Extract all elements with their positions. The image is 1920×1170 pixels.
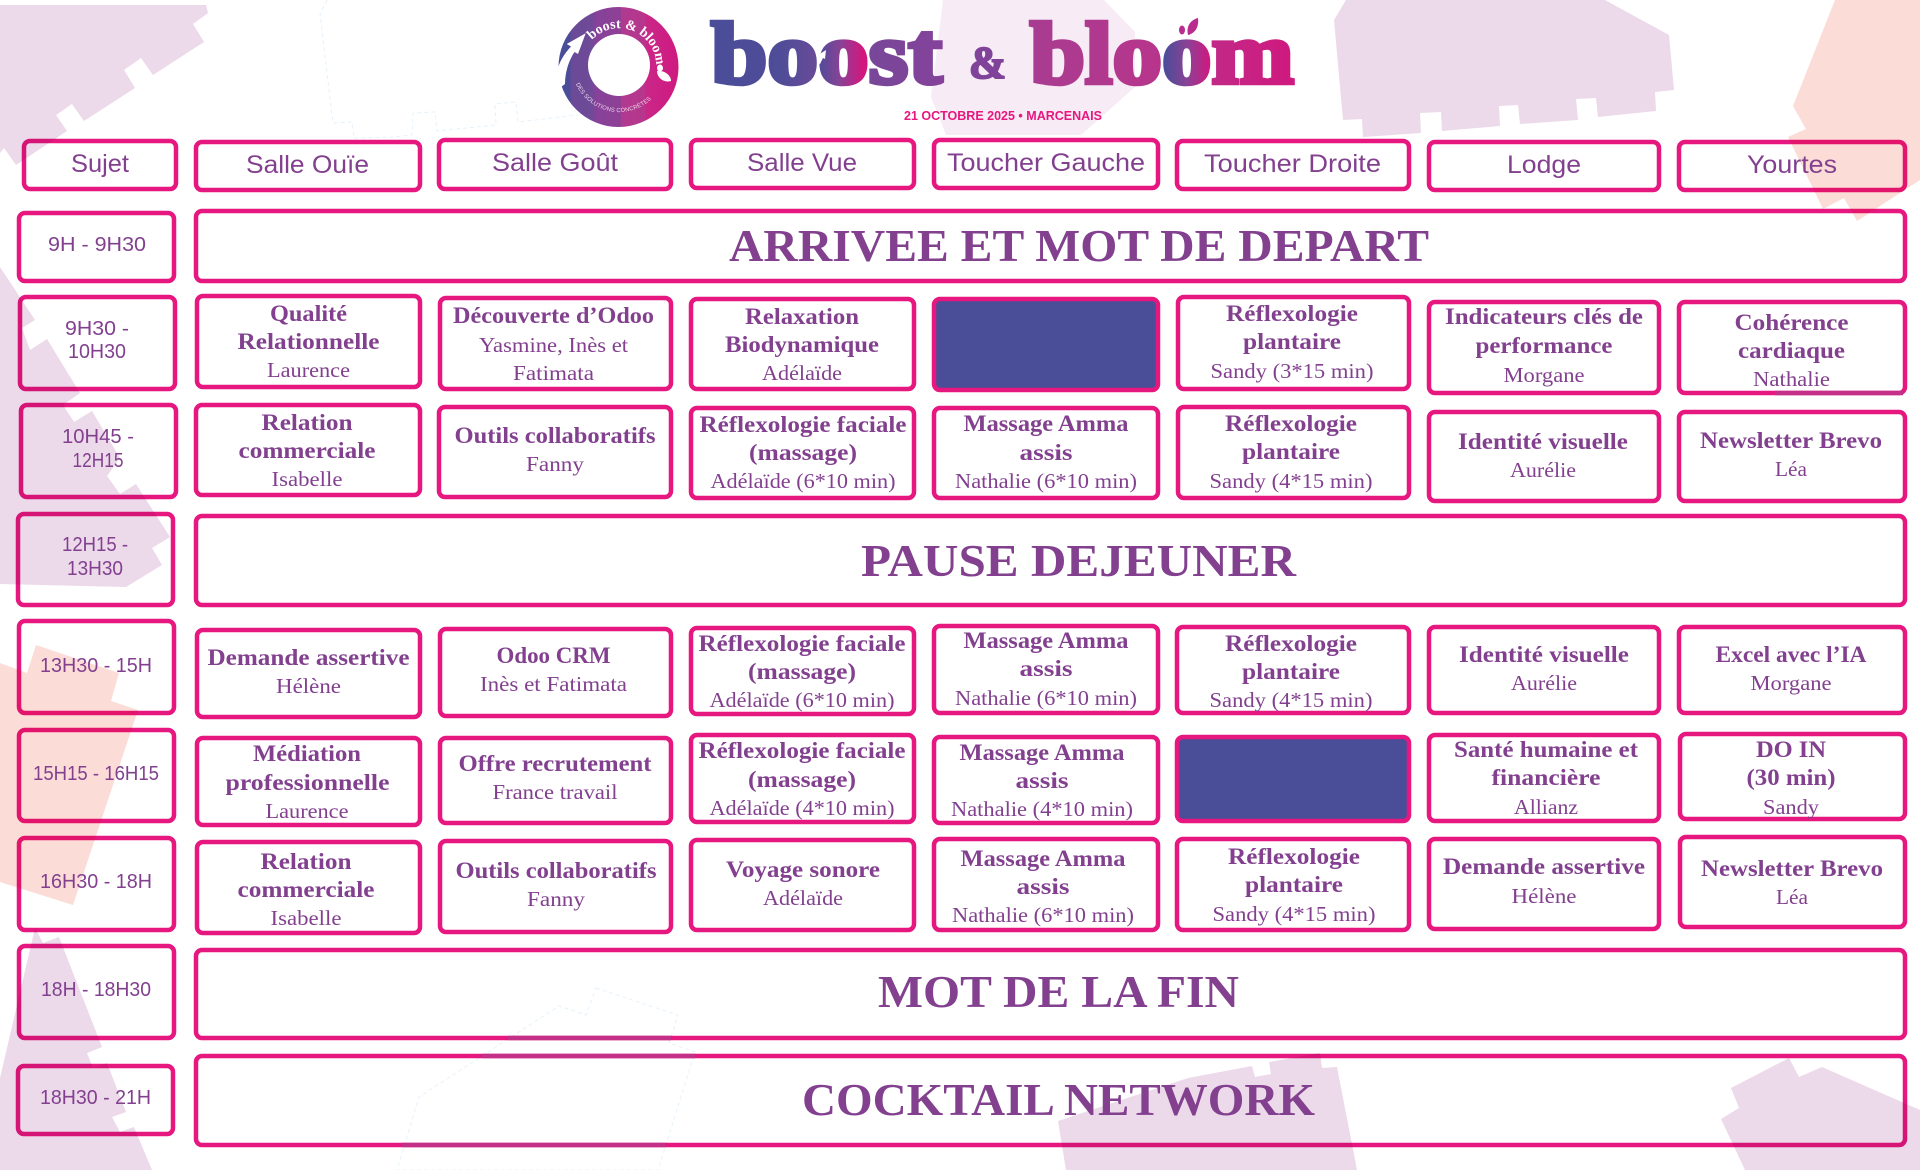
session: DO IN: DO IN [1756,737,1826,762]
session: Excel avec l'IA [1679,627,1905,713]
header: Salle Gout [439,140,671,189]
wordmark: ampersand: & [969,37,1006,88]
session: Decouverte d'Odoo: Découverte d’Odoo [453,303,654,328]
time: 9H30 - 10H30: 10H30 [68,341,126,363]
session: Mediation professionnelle: professionnelle [226,770,390,795]
header: Lodge: Lodge [1507,151,1581,179]
session: Qualite Relationnelle: Laurence [267,358,350,382]
row: 13H30 - 15H [19,621,1905,717]
session: Relation commerciale: Relation [260,849,352,874]
session: Reflexologie faciale 6x10: (massage) [748,659,856,684]
time: 10H45 - 12H15: 10H45 - [62,426,134,448]
session: Newsletter Brevo: Newsletter Brevo [1701,856,1883,881]
session: Reflexologie plantaire 4x15: Sandy (4*15 min) [1210,469,1372,493]
session: Decouverte d'Odoo: Fatimata [513,361,594,385]
session: Reflexologie faciale 6x10: Adélaïde (6*10 min) [710,688,894,712]
session: Reflexologie plantaire 3x15: plantaire [1243,329,1341,354]
session: Massage Amma assis 6x10: assis [1020,656,1073,681]
session: Newsletter Brevo: Léa [1775,457,1807,481]
session: Identite visuelle: Aurélie [1511,671,1577,695]
session: Massage Amma assis 6x10: assis [1016,874,1070,899]
session: Odoo CRM: Inès et Fatimata [480,672,627,696]
row: 16H30 - 18H [19,837,1905,933]
background shape: top left [0,5,208,165]
time: 18H30 - 21H: 18H30 - 21H [40,1087,151,1109]
session: Relaxation Biodynamique [691,299,914,389]
logo ring text bottom: DES SOLUTIONS CONCRÈTES [576,82,651,112]
blocked slot: Toucher Droite [1177,737,1409,821]
session: Outils collaboratifs [439,407,671,497]
session: Newsletter Brevo: Léa [1776,885,1808,909]
session: Massage Amma assis 6x10: Massage Amma [964,628,1129,653]
session: Excel avec l'IA: Excel avec l’IA [1716,642,1867,667]
blocked slot: Toucher Gauche [934,299,1158,390]
time: 12H15 - 13H30 [18,514,173,605]
header: Salle Vue [691,140,914,188]
logo arrow [557,33,586,90]
session: Massage Amma assis 6x10 [934,408,1158,498]
session: Reflexologie faciale 6x10: Adélaïde (6*10 min) [710,469,896,493]
header: Salle Vue: Salle Vue [747,149,857,177]
header: Toucher Gauche: Toucher Gauche [947,149,1145,177]
session: Demande assertive [1429,839,1659,929]
session: Relation commerciale [196,405,420,495]
session: Relation commerciale: commerciale [238,438,376,463]
session: Identite visuelle: Identité visuelle [1458,429,1628,454]
wordmark: small arrow [817,50,826,64]
session: Relaxation Biodynamique: Adélaïde [762,361,842,385]
time: 9H - 9H30: 9H - 9H30 [48,234,146,256]
session: Sante humaine et financiere [1429,735,1659,821]
banner: pause dejeuner: PAUSE DEJEUNER [861,535,1297,586]
background shape: left peach [0,645,138,905]
session: Reflexologie plantaire 4x15: Réflexologie [1225,631,1357,656]
background shape: bottom left purple [0,928,152,1170]
time: 10H45 - 12H15 [21,405,176,497]
session: Coherence cardiaque [1679,302,1905,393]
session: Sante humaine et financiere: Allianz [1514,795,1578,819]
session: Coherence cardiaque: Nathalie [1753,367,1830,391]
banner: mot de la fin: MOT DE LA FIN [878,966,1239,1017]
time: 13H30 - 15H: 13H30 - 15H [40,655,152,677]
header row [24,140,1905,190]
session: Identite visuelle [1429,627,1659,713]
header: Toucher Gauche [934,140,1158,188]
header: Toucher Droite [1177,141,1409,189]
session: Newsletter Brevo [1679,412,1905,501]
session: Relation commerciale: Isabelle [270,906,342,930]
time: 9H - 9H30 [19,213,174,281]
session: Massage Amma assis 6x10 [934,626,1158,713]
header: Yourtes: Yourtes [1747,151,1837,179]
wordmark: bloom: bloom [1030,6,1294,103]
header: Sujet: Sujet [71,150,129,178]
session: Reflexologie plantaire 4x15: plantaire [1242,439,1340,464]
session: Voyage sonore [691,840,914,930]
session: Massage Amma assis 6x10: Massage Amma [960,846,1126,871]
session: Offre recrutement: France travail [492,780,618,804]
row: 9H30 - 10H30 [20,296,1905,393]
session: Relaxation Biodynamique: Biodynamique [725,332,879,357]
session: Massage Amma assis 4x10: assis [1016,768,1069,793]
time: 18H30 - 21H [18,1066,173,1134]
session: Relaxation Biodynamique: Relaxation [745,304,859,329]
session: Reflexologie plantaire 4x15 [1178,407,1409,498]
banner: mot de la fin [196,950,1905,1038]
session: Identite visuelle: Aurélie [1510,458,1576,482]
row: 12H15 - 13H30 [18,514,1905,605]
session: Reflexologie plantaire 4x15 [1177,839,1409,930]
background shape: bottom right purple [1721,1058,1920,1170]
time: 12H15 - 13H30: 12H15 - [62,534,128,556]
session: Reflexologie plantaire 4x15: plantaire [1242,659,1340,684]
time: 9H30 - 10H30 [20,297,175,389]
row: 10H45 - 12H15 [21,405,1905,501]
time: 15H15 - 16H15 [19,730,174,821]
logo: circular badge [558,7,678,127]
header: Salle Ouie [196,142,420,190]
row: 18H - 18H30 [19,946,1905,1038]
session: DO IN: Sandy [1763,795,1819,819]
row: 18H30 - 21H [18,1056,1905,1145]
session: Demande assertive [197,630,420,717]
session: Excel avec l'IA: Morgane [1750,671,1832,695]
session: Massage Amma assis 6x10 [934,839,1158,930]
session: DO IN [1680,734,1905,819]
session: Offre recrutement [440,738,671,823]
session: Massage Amma assis 4x10: Nathalie (4*10 min) [951,797,1133,821]
header: Salle Gout: Salle Goût [492,149,618,177]
session: Qualite Relationnelle: Qualité [270,301,347,326]
session: Relation commerciale: Isabelle [272,467,342,491]
session: Mediation professionnelle [197,738,420,825]
header: Yourtes [1679,142,1905,190]
session: Demande assertive: Demande assertive [1443,854,1645,879]
session: Odoo CRM: Odoo CRM [496,643,611,668]
session: Identite visuelle [1429,412,1659,501]
session: Massage Amma assis 4x10 [934,737,1158,823]
session: Sante humaine et financiere: financière [1492,765,1600,790]
session: Offre recrutement: Offre recrutement [458,751,652,776]
session: Reflexologie plantaire 4x15: Réflexologie [1225,411,1357,436]
session: Massage Amma assis 6x10: Nathalie (6*10 min) [955,686,1137,710]
session: Identite visuelle: Identité visuelle [1459,642,1629,667]
session: Reflexologie faciale 4x10 [691,735,914,822]
session: Indicateurs cles de performance: Indicateurs clés de [1445,304,1643,329]
time: 16H30 - 18H: 16H30 - 18H [40,871,152,893]
session: Indicateurs cles de performance: Morgane [1504,363,1584,387]
background outline: top center dashed [320,0,578,138]
row: 15H15 - 16H15 [19,730,1905,825]
session: Massage Amma assis 6x10: Nathalie (6*10 min) [952,903,1134,927]
logo ring [558,7,678,127]
session: Qualite Relationnelle [197,296,420,387]
header: Lodge [1429,142,1659,190]
session: Reflexologie faciale 6x10: (massage) [749,440,857,465]
session: Reflexologie plantaire 3x15 [1178,297,1409,389]
session: Demande assertive: Hélène [1512,884,1576,908]
session: Reflexologie plantaire 3x15: Sandy (3*15 min) [1210,359,1374,383]
session: Reflexologie plantaire 3x15: Réflexologie [1226,301,1358,326]
session: Reflexologie plantaire 4x15: Sandy (4*15 min) [1212,902,1376,926]
session: Indicateurs cles de performance: performance [1476,333,1612,358]
time: 18H - 18H30: 18H - 18H30 [41,979,151,1001]
session: Outils collaboratifs: Outils collaboratifs [454,423,656,448]
session: Voyage sonore: Adélaïde [763,886,843,910]
session: Voyage sonore: Voyage sonore [726,857,880,882]
time: 15H15 - 16H15: 15H15 - 16H15 [33,763,159,785]
logo ring text top: boost & bloom [586,20,663,65]
header: Toucher Droite: Toucher Droite [1204,150,1381,178]
session: Outils collaboratifs: Fanny [527,887,585,911]
session: Outils collaboratifs: Outils collaboratifs [456,858,657,883]
date line: 21 OCTOBRE 2025 • MARCENAIS [904,108,1102,123]
wordmark: leaf [1179,18,1198,35]
session: DO IN: (30 min) [1746,765,1836,790]
row: 9H - 9H30 [19,211,1905,281]
session: Relation commerciale: commerciale [238,877,374,902]
session: Relation commerciale: Relation [262,410,353,435]
time: 12H15 - 13H30: 13H30 [67,558,123,580]
session: Reflexologie faciale 6x10: Réflexologie faciale [700,412,906,437]
session: Decouverte d'Odoo: Yasmine, Inès et [479,333,628,357]
session: Coherence cardiaque: cardiaque [1738,338,1845,363]
time: 10H45 - 12H15: 12H15 [72,450,124,472]
banner: cocktail network [196,1056,1905,1145]
background shape: bottom center purple [1058,1053,1357,1170]
session: Newsletter Brevo: Newsletter Brevo [1700,428,1882,453]
background shape: left purple [0,267,170,587]
banner: cocktail network: COCKTAIL NETWORK [802,1074,1315,1125]
background shape: faint behind title [931,0,1135,135]
session: Massage Amma assis 6x10: assis [1020,440,1073,465]
session: Reflexologie plantaire 4x15 [1177,627,1409,713]
session: Massage Amma assis 4x10: Massage Amma [960,740,1125,765]
session: Demande assertive: Demande assertive [208,645,410,670]
session: Reflexologie faciale 4x10: Adélaïde (4*10 min) [710,796,894,820]
session: Reflexologie faciale 4x10: Réflexologie faciale [698,738,906,763]
session: Newsletter Brevo [1680,837,1905,927]
time: 13H30 - 15H [19,621,174,713]
session: Mediation professionnelle: Laurence [266,799,348,823]
session: Relation commerciale [197,842,420,933]
session: Demande assertive: Hélène [276,674,341,698]
session: Reflexologie plantaire 4x15: Sandy (4*15 min) [1210,688,1372,712]
time: 9H30 - 10H30: 9H30 - [65,318,129,340]
logo leaf [657,64,671,81]
session: Reflexologie faciale 4x10: (massage) [748,767,856,792]
header: Salle Ouie: Salle Ouïe [246,151,369,179]
session: Reflexologie faciale 6x10 [691,408,914,498]
background shape: top right peach [1788,0,1920,221]
wordmark: boost: boost [711,6,942,103]
session: Odoo CRM [440,629,671,716]
session: Reflexologie faciale 6x10 [691,628,914,714]
banner: arrivee [196,211,1905,281]
background outline: bottom center dashed [397,988,695,1170]
session: Massage Amma assis 6x10: Massage Amma [964,411,1129,436]
time: 18H - 18H30 [19,946,174,1038]
session: Qualite Relationnelle: Relationnelle [238,329,380,354]
session: Indicateurs cles de performance [1429,302,1659,393]
banner: arrivee: ARRIVEE ET MOT DE DEPART [729,220,1429,271]
session: Sante humaine et financiere: Santé humaine et [1454,737,1638,762]
session: Massage Amma assis 6x10: Nathalie (6*10 min) [955,469,1137,493]
time: 16H30 - 18H [19,838,174,930]
session: Reflexologie faciale 6x10: Réflexologie faciale [698,631,906,656]
session: Reflexologie plantaire 4x15: plantaire [1245,872,1343,897]
session: Mediation professionnelle: Médiation [253,741,361,766]
background shape: top right purple [1334,0,1674,137]
session: Decouverte d'Odoo [440,298,671,389]
session: Outils collaboratifs: Fanny [526,452,584,476]
session: Outils collaboratifs [440,841,671,932]
banner: pause dejeuner [196,516,1905,605]
session: Coherence cardiaque: Cohérence [1734,310,1848,335]
header: Sujet [24,141,176,189]
session: Reflexologie plantaire 4x15: Réflexologie [1228,844,1360,869]
